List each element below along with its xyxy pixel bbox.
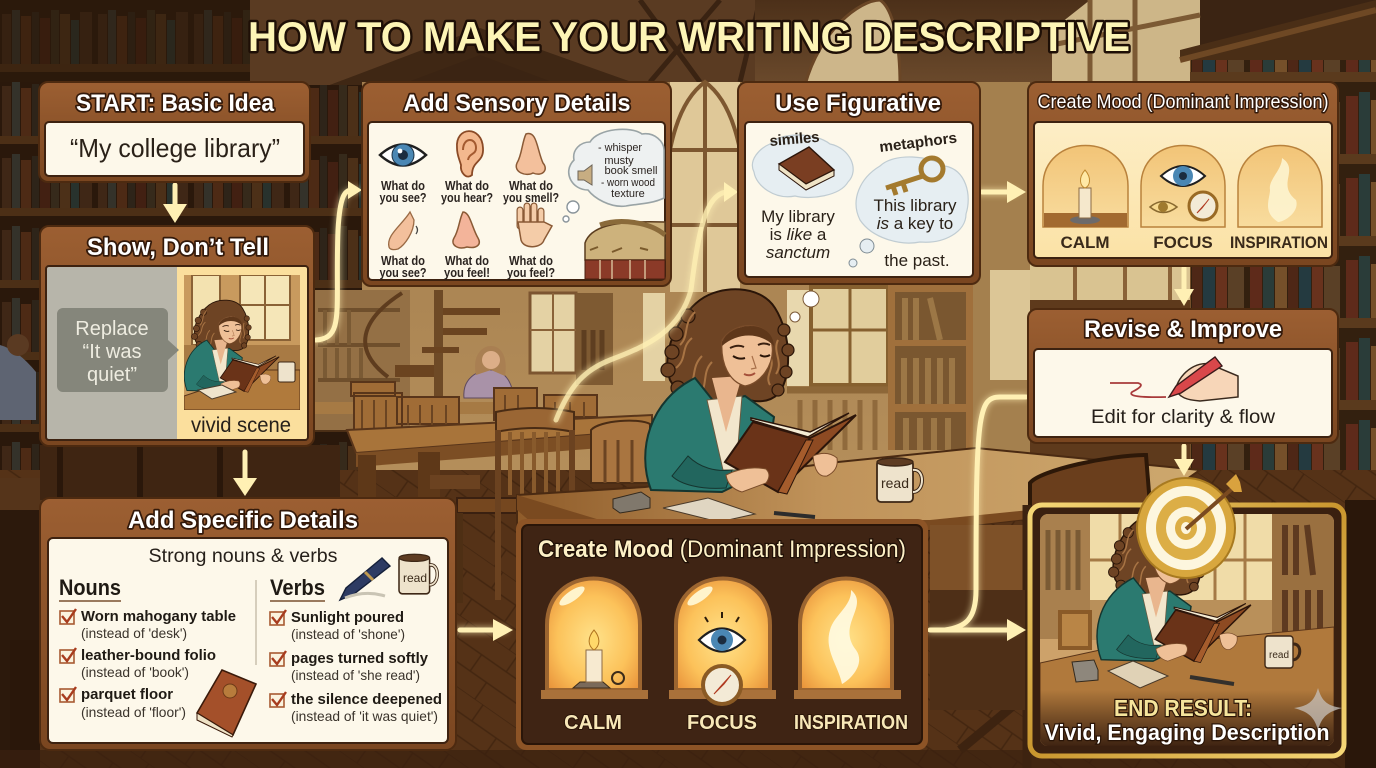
icon: inspiration swirl window: [794, 578, 901, 699]
icon: eye and compass window: [669, 578, 776, 704]
text: mood labels: [564, 712, 908, 734]
callout: sensory thought cloud: - worn wood: [601, 177, 655, 189]
panel: end result: [1030, 505, 1344, 756]
text: what do you feel second: [507, 254, 555, 280]
text: mood labels: FOCUS: [687, 712, 757, 734]
text: simile sentence: is like a: [770, 225, 827, 244]
panel: start basic idea: [39, 82, 310, 182]
column: verbs: Sunlight poured: [291, 609, 404, 626]
panel: show, don't tell: [40, 226, 314, 446]
heading: Use Figurative: [775, 90, 941, 117]
column: nouns: Worn mahogany table: [81, 608, 236, 625]
heading: Revise & Improve: [1084, 316, 1282, 343]
icon: nose second: [453, 212, 479, 248]
text: what do you hear: you hear?: [441, 191, 493, 205]
text: mood labels: CALM: [564, 712, 622, 734]
callout: metaphors cloud: is a key to: [877, 214, 953, 233]
callout: metaphors cloud: This library: [873, 196, 957, 215]
text: end result: [1044, 695, 1330, 745]
column: verbs: (instead of 'shone'): [291, 626, 405, 642]
text: vivid scene label: vivid scene: [191, 414, 291, 437]
illustration: vivid scene picture: [184, 275, 300, 410]
text: end result: END RESULT:: [1114, 695, 1252, 721]
panel: add specific details: [40, 498, 456, 750]
text: simile sentence: sanctum: [766, 243, 830, 262]
panel: create mood small: [1028, 82, 1338, 266]
text: what do you smell: [503, 179, 559, 205]
icon: hand writing with pen: [1110, 357, 1238, 401]
column: nouns: Nouns: [59, 575, 121, 600]
icon: ear: [457, 131, 483, 177]
text: edit for clarity: Edit for clarity & flow: [1091, 407, 1275, 428]
text: what do you smell: you smell?: [503, 191, 559, 205]
callout: replace it was quiet: quiet”: [87, 364, 137, 386]
callout: replace it was quiet: Replace: [75, 318, 149, 340]
callout: metaphors cloud: the past.: [884, 251, 950, 270]
heading: Create Mood (Dominant Impression): [538, 536, 906, 563]
column: verbs: [270, 575, 442, 724]
column: verbs: (instead of 'she read'): [291, 667, 420, 683]
column: nouns: (instead of 'floor'): [81, 704, 186, 720]
text: what do you feel: [444, 254, 490, 280]
icon: leather book: [197, 670, 256, 737]
text: what do you feel second: What do: [509, 254, 553, 268]
icon: inspiration swirl arch: [1238, 146, 1322, 227]
column: nouns: (instead of 'book'): [81, 664, 189, 680]
icon: arm: [389, 212, 418, 250]
heading: START: Basic Idea: [76, 90, 275, 117]
arrow glow layer: [316, 190, 1026, 630]
column: nouns: parquet floor: [81, 686, 173, 703]
callout: sensory thought cloud: [563, 129, 664, 222]
callout: sensory thought cloud: - whisper: [598, 142, 642, 154]
text: mood labels: INSPIRATION: [794, 712, 908, 734]
panel: use figurative: [738, 82, 980, 284]
callout: replace it was quiet: [57, 308, 179, 392]
icon: thought bubbles above woman: [790, 291, 819, 322]
callout: replace it was quiet: “It was: [83, 341, 141, 363]
text: mood labels: [1060, 233, 1328, 252]
text: strong nouns and verbs: Strong nouns & verbs: [148, 546, 338, 567]
callout: sensory thought cloud: musty: [604, 155, 634, 167]
text: what do you hear: What do: [445, 179, 489, 193]
text: what do you smell: What do: [509, 179, 553, 193]
icon: candle arch: [1043, 146, 1128, 227]
column: nouns: leather-bound folio: [81, 647, 216, 664]
text: mood labels: CALM: [1060, 233, 1110, 252]
text: basic idea quote: “My college library”: [70, 133, 280, 163]
heading: Show, Don’t Tell: [87, 234, 269, 261]
text: what do you feel: What do: [445, 254, 489, 268]
icon: target with arrow: [1137, 474, 1242, 578]
title: HOW TO MAKE YOUR WRITING DESCRIPTIVE: [248, 13, 1130, 60]
callout: metaphors cloud: [849, 130, 968, 270]
column: verbs: (instead of 'it was quiet'): [291, 708, 438, 724]
text: what do you see: What do: [381, 179, 425, 193]
arrows: glowing flow connectors: [163, 181, 1194, 641]
panel: revise and improve: [1028, 309, 1338, 443]
column: nouns: (instead of 'desk'): [81, 625, 187, 641]
text: what do you see: you see?: [380, 191, 426, 205]
callout: similes cloud: [752, 129, 853, 197]
text: what do you see: [380, 179, 426, 205]
illustration: woman reading at table: [613, 289, 922, 522]
icon: candle window: [541, 578, 648, 699]
text: what do you hear: [441, 179, 493, 205]
callout: similes cloud: similes: [769, 129, 820, 150]
icon: hand: [518, 206, 552, 247]
text: what do you see row two: you see?: [380, 266, 426, 280]
text: what do you feel second: you feel?: [507, 266, 555, 280]
column: verbs: Verbs: [270, 575, 325, 600]
panel: add sensory details: [362, 82, 671, 286]
icon: nose: [516, 133, 545, 174]
text: end result: Vivid, Engaging Description: [1044, 720, 1330, 745]
icon: eye and compass arch: [1141, 146, 1225, 227]
text: mood labels: FOCUS: [1153, 233, 1213, 252]
panel: create mood large: [516, 519, 928, 750]
callout: sensory thought cloud: book smell: [604, 165, 658, 177]
icon: eye: [380, 144, 426, 166]
text: simile sentence: My library: [761, 207, 835, 226]
heading: Add Sensory Details: [404, 90, 630, 117]
text: what do you see row two: What do: [381, 254, 425, 268]
callout: metaphors cloud: metaphors: [878, 130, 958, 156]
icon: old books stack: [585, 222, 665, 279]
column: verbs: pages turned softly: [291, 650, 429, 667]
illustration: end result scene: [1040, 513, 1334, 746]
heading: Add Specific Details: [128, 507, 358, 534]
text: simile sentence: [761, 207, 835, 262]
text: what do you see row two: [380, 254, 426, 280]
illustration: woman reading at table: read: [881, 475, 909, 491]
icon: sparkle watermark: [1294, 688, 1342, 730]
column: verbs: the silence deepened: [291, 691, 442, 708]
text: mood labels: INSPIRATION: [1230, 233, 1328, 252]
column: nouns: [59, 575, 236, 720]
text: what do you feel: you feel!: [444, 266, 490, 280]
icon: read mug: [399, 554, 437, 594]
heading: Create Mood (Dominant Impression): [1038, 92, 1328, 113]
icon: fountain pen: [340, 558, 390, 600]
illustration: end result scene: read: [1269, 650, 1289, 661]
icon: read mug: read: [403, 571, 427, 585]
callout: sensory thought cloud: texture: [611, 188, 645, 200]
